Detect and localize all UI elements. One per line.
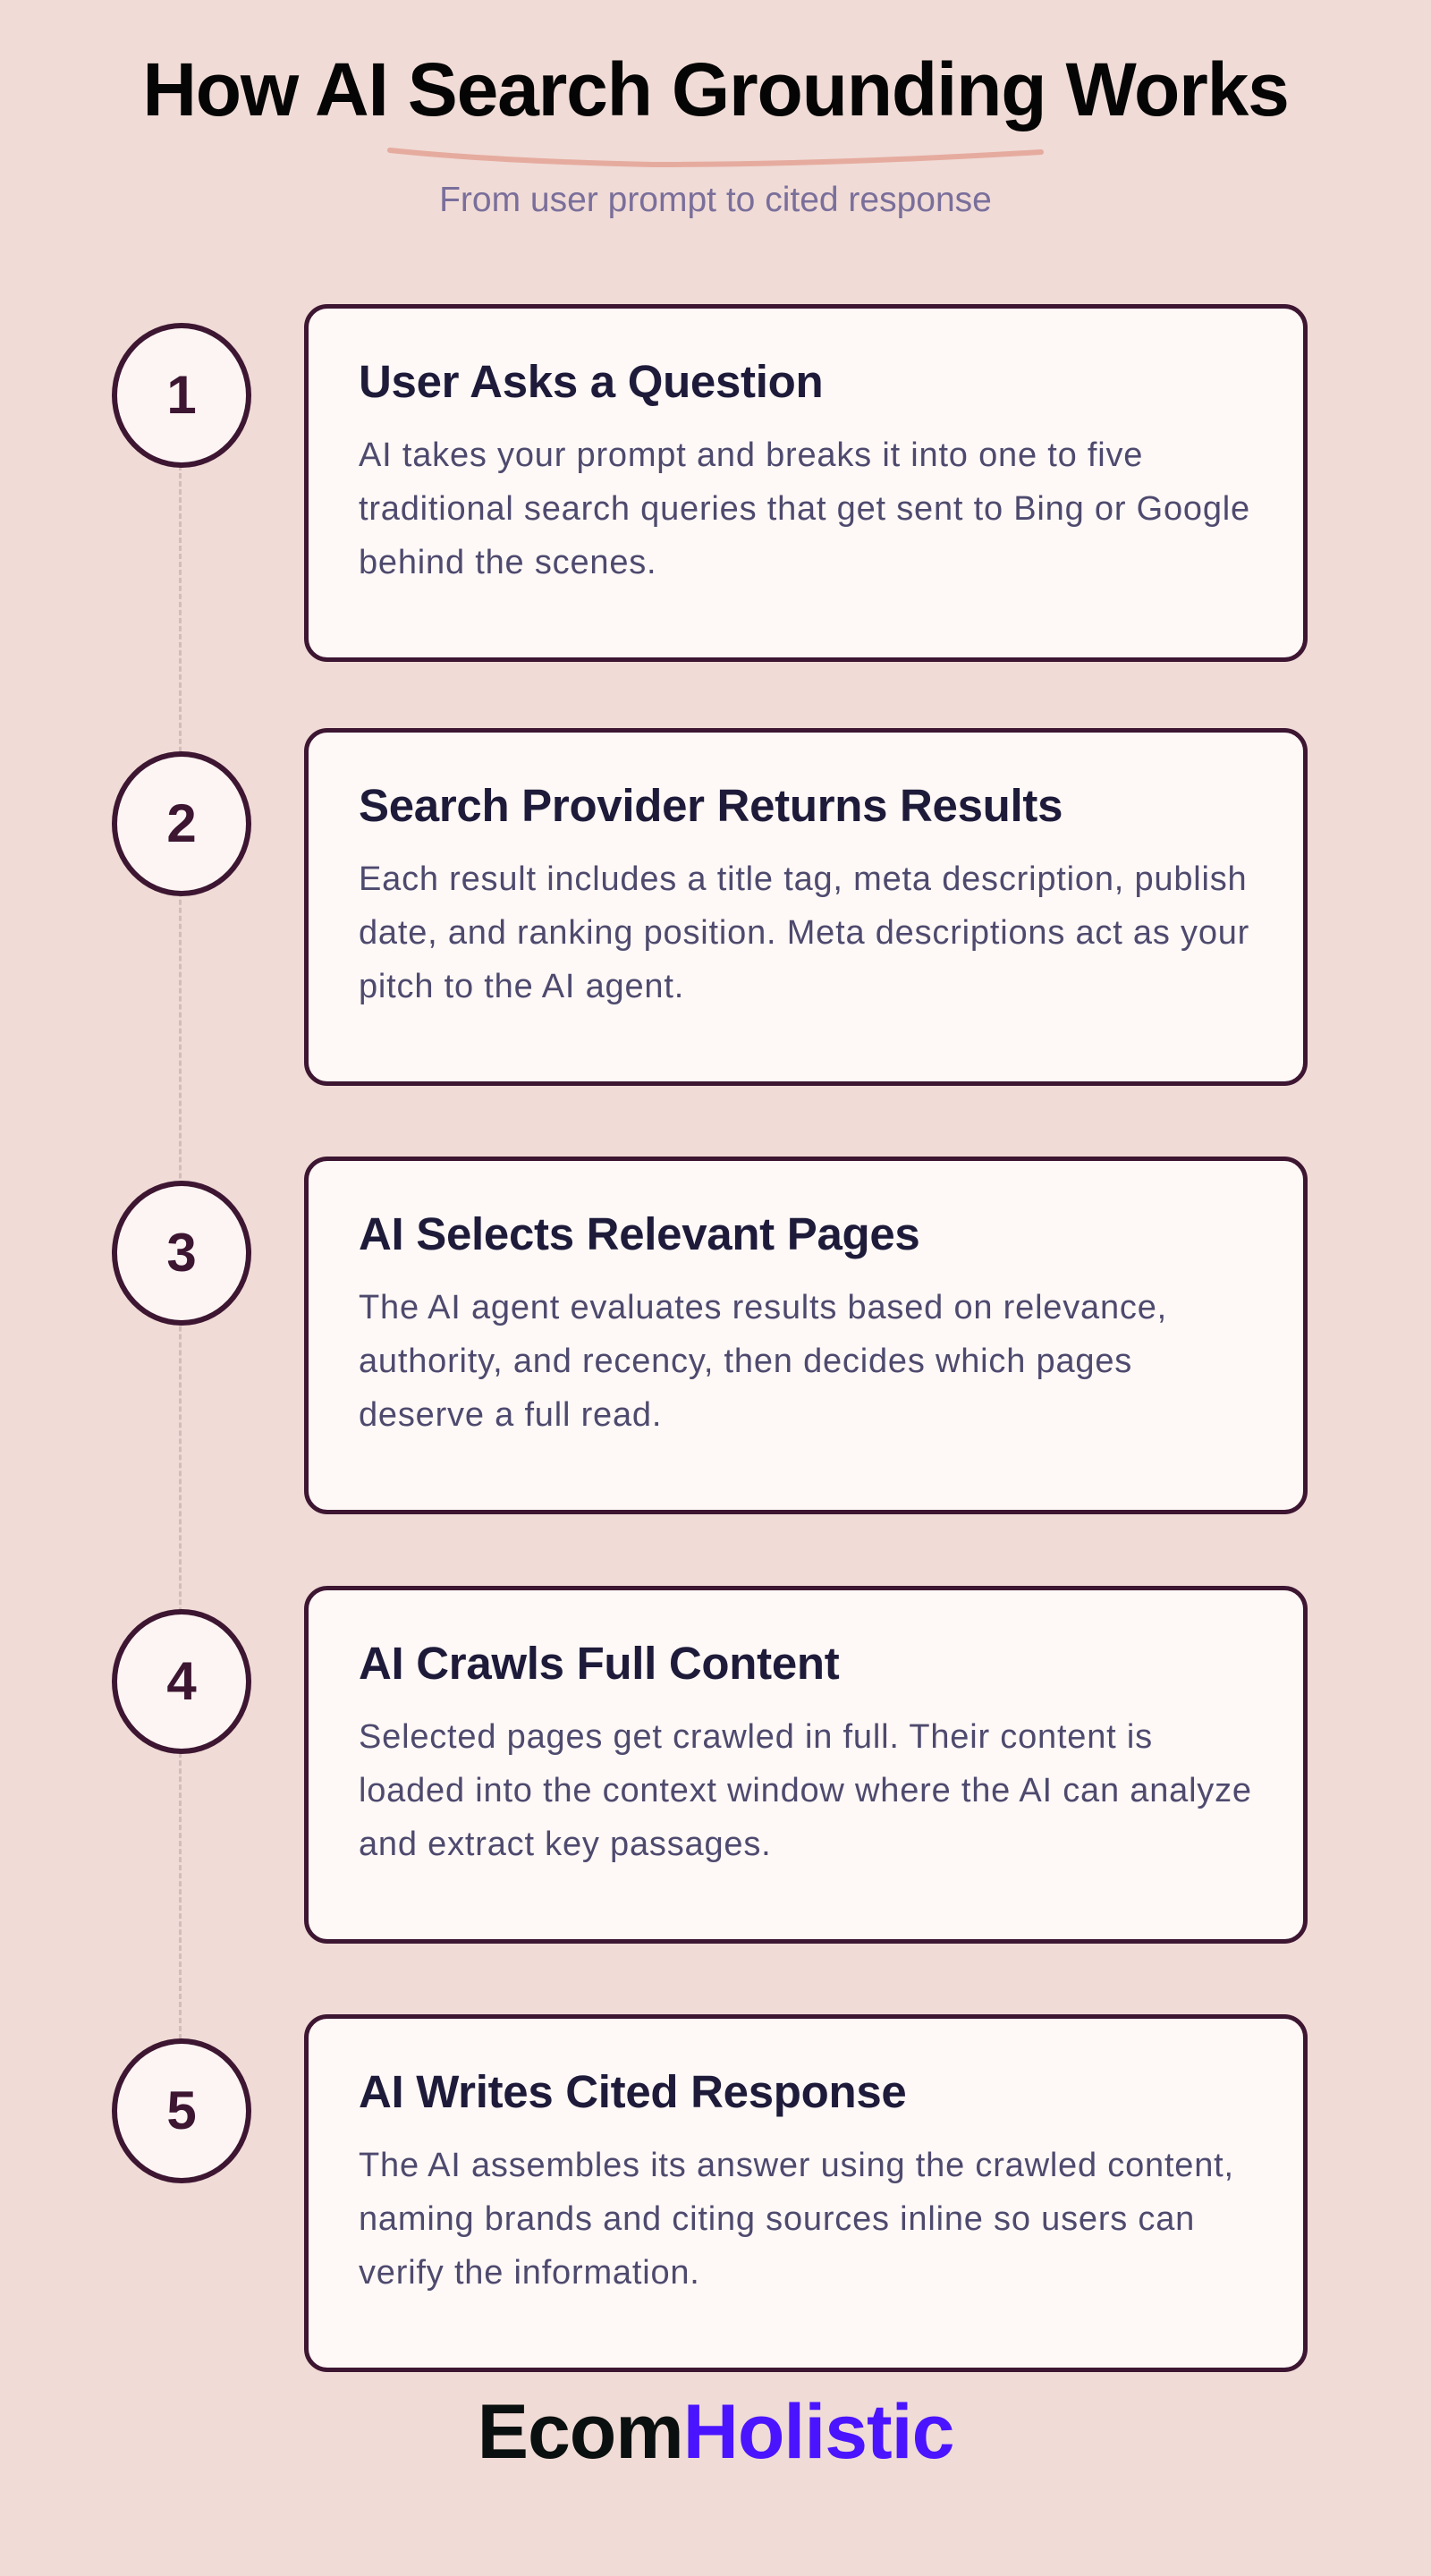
card 4: AI Crawls Full Content — [359, 1638, 839, 1689]
title: How AI Search Grounding Works — [142, 47, 1289, 131]
step 3 number: 3 — [166, 1223, 197, 1283]
card 2 — [304, 728, 1308, 1086]
card 2: Each result includes a title tag, meta description, publish — [359, 860, 1247, 898]
card 1: traditional search queries that get sent to Bing or Google — [359, 490, 1250, 528]
card 4: Selected pages get crawled in full. Their content is — [359, 1718, 1153, 1756]
card 4: and extract key passages. — [359, 1826, 771, 1863]
title underline — [387, 148, 1044, 167]
step 1 number — [112, 323, 251, 468]
step 2 number — [112, 751, 251, 896]
step 5 number — [112, 2038, 251, 2183]
logo: EcomHolistic — [478, 2389, 953, 2475]
step 3 number — [112, 1181, 251, 1326]
subtitle: From user prompt to cited response — [439, 181, 992, 219]
step 4 number: 4 — [166, 1651, 197, 1711]
card 1: behind the scenes. — [359, 544, 656, 581]
step 1 number: 1 — [166, 365, 197, 425]
card 3: deserve a full read. — [359, 1396, 662, 1434]
card 5: AI Writes Cited Response — [359, 2066, 907, 2117]
card 1: AI takes your prompt and breaks it into one to five — [359, 436, 1143, 474]
step 2 number: 2 — [166, 793, 197, 853]
card 5 — [304, 2014, 1308, 2372]
card 5: naming brands and citing sources inline so users can — [359, 2200, 1195, 2238]
card 4 — [304, 1586, 1308, 1944]
card 3: The AI agent evaluates results based on relevance, — [359, 1289, 1167, 1326]
step 4 number — [112, 1609, 251, 1754]
card 4: loaded into the context window where the AI can analyze — [359, 1772, 1252, 1809]
card 1 — [304, 304, 1308, 662]
card 5: The AI assembles its answer using the crawled content, — [359, 2147, 1234, 2184]
card 5: verify the information. — [359, 2254, 700, 2292]
card 1: User Asks a Question — [359, 356, 823, 407]
card 3: AI Selects Relevant Pages — [359, 1208, 919, 1259]
step 5 number: 5 — [166, 2080, 197, 2140]
card 3 — [304, 1157, 1308, 1514]
card 2: date, and ranking position. Meta descriptions act as your — [359, 914, 1249, 952]
card 2: Search Provider Returns Results — [359, 780, 1063, 831]
card 2: pitch to the AI agent. — [359, 968, 684, 1005]
timeline dashes — [179, 465, 182, 2039]
card 3: authority, and recency, then decides which pages — [359, 1343, 1132, 1380]
